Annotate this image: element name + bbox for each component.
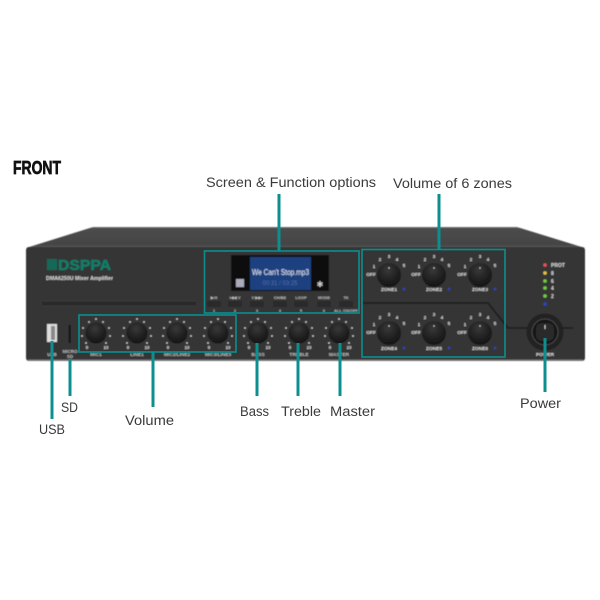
zone knob 4: OFF [366,330,376,336]
knob: MASTER [324,318,354,358]
zone knob 3: OFF [457,272,467,278]
zone knob 2: 3 [433,254,436,260]
display screen [231,255,329,291]
knob: BASS: 0 [248,345,251,350]
amplifier chassis [26,227,585,361]
arrow line: USB [50,341,54,419]
bottom edge highlight [28,360,583,361]
knob: MIC1: 10 [103,345,109,350]
zone knob 2: 1 [418,264,421,270]
USB port [47,324,57,357]
zone knob 6: 1 [464,322,467,328]
level LED indicators: 2 [551,294,554,300]
zone knob 1 [366,254,406,293]
CD slot [41,301,197,306]
label: SD: SD [61,400,78,415]
label: Volume of 6 zones: Volume of 6 zones [393,176,512,191]
micro SD slot [62,325,78,359]
function buttons [207,295,359,313]
zone knob 2 [411,254,451,293]
zone knob 3: ZONE3 [472,287,488,293]
label: USB: USB [39,422,65,437]
function buttons: 6 [323,308,326,313]
zone knob 4: 3 [388,312,391,318]
chassis top surface [26,227,585,248]
zone knob 6 [457,312,497,352]
USB port: USB [47,352,57,357]
zone knob 6: 3 [479,312,482,318]
knob: MIC2/LINE2: 0 [167,345,170,350]
chassis front face [26,247,585,361]
zone knob 1: 3 [388,254,391,260]
display screen: 00:31 / 03:25 [262,281,298,287]
knob: MASTER: 10 [346,345,352,350]
zone knob 5: 5 [448,321,451,327]
function buttons: TK [343,295,349,300]
knob: MIC3/LINE3: 10 [225,345,231,350]
knob: MIC1 [81,318,111,358]
knob: MIC2/LINE2: MIC2/LINE2 [164,352,191,358]
knob: BASS [243,318,273,358]
knob: MIC1: MIC1 [90,352,102,358]
knob: MASTER: 0 [329,345,332,350]
knob: MIC3/LINE3 [203,318,233,358]
zone knob 5: 2 [424,315,427,321]
label: Master: Master [330,404,376,419]
zone knob 2: 4 [441,257,444,263]
label: Bass: Bass [240,404,269,419]
label: Screen & Function options: Screen & Function options [206,175,376,190]
zone knob 6: ZONE6 [472,346,488,352]
zone knob 4: 1 [373,322,376,328]
function buttons: MODE [318,295,330,300]
brand logo: DSPPA: DSPPA [58,258,112,274]
zone knob 4: 5 [403,321,406,327]
zone knob 1: 1 [373,264,376,270]
arrow line: zones [438,194,440,250]
function buttons: 4 [279,308,282,313]
knob: LINE1: 10 [144,345,150,350]
zone knob 5: 1 [418,322,421,328]
function buttons: LOOP [295,295,307,300]
zone knob 2: 2 [424,257,427,263]
knob: MIC3/LINE3: MIC3/LINE3 [205,352,232,358]
callout box: screen and function options [204,251,359,313]
knob: MIC2/LINE2: 10 [184,345,190,350]
arrow line: treble [296,343,300,396]
callout box: volume knobs [79,315,236,352]
knob: LINE1: LINE1 [130,352,144,358]
zone knob 1: 4 [396,257,399,263]
function buttons: I◀◀ V [229,295,241,300]
zone knob 5: ZONE5 [426,346,442,352]
zone knob 2: OFF [411,272,421,278]
zone knob 5 [411,312,451,352]
zone knob 4 [366,312,406,352]
zone knob 2: 5 [448,263,451,269]
function buttons: ALL ON/OFF [334,308,359,313]
title: FRONT: FRONT [13,157,62,178]
function buttons: 5 [300,308,303,313]
zone knob 3: 4 [487,257,490,263]
knob: TREBLE: TREBLE [289,352,309,358]
knob: MIC3/LINE3: 0 [208,345,211,350]
function buttons: 2 [234,308,237,313]
display screen: ✱ [317,280,324,289]
callout box: zones [362,250,505,357]
arrow line: bass [256,343,258,396]
label: Treble: Treble [281,404,321,419]
zone knob 3 [457,254,497,293]
decorative panel groove [362,303,573,328]
arrow line: SD [68,359,72,396]
function buttons: CH/BE [274,295,287,300]
knob: MIC2/LINE2 [162,318,192,358]
micro SD slot: SD [67,354,74,359]
knob: TREBLE [284,318,314,358]
arrow line: master [338,343,342,396]
power switch: POWER [536,352,555,358]
knob: BASS: BASS [251,352,265,358]
level LED indicators: 4 [551,286,554,292]
arrow line: screen [278,194,280,251]
function buttons: 3 [256,308,259,313]
zone knob 3: 1 [464,264,467,270]
arrow line: power [544,338,546,392]
zone knob 1: 5 [403,263,406,269]
level LED indicators [543,263,565,306]
zone knob 5: OFF [411,330,421,336]
zone knob 3: 3 [479,254,482,260]
zone knob 6: 2 [470,315,473,321]
zone knob 5: 4 [441,315,444,321]
zone knob 5: 3 [433,312,436,318]
arrow line: volume [152,352,154,407]
knob: MIC1: 0 [86,345,89,350]
power switch [526,314,564,358]
knob: LINE1 [122,318,152,358]
label: Volume: Volume [125,413,174,428]
zone knob 3: 2 [470,257,473,263]
knob: BASS: 10 [265,345,271,350]
zone knob 4: ZONE4 [381,346,397,352]
zone knob 4: 4 [396,315,399,321]
zone knob 2: ZONE2 [426,287,442,293]
knob: MASTER: MASTER [329,352,350,358]
zone knob 1: 2 [379,257,382,263]
function buttons: 1 [213,308,216,313]
label: Power: Power [520,396,562,411]
zone knob 6: OFF [457,330,467,336]
function buttons: V ▶▶I [251,295,263,300]
zone knob 6: 5 [494,321,497,327]
model name: DMA6250U Mixer Amplifier [46,276,114,282]
level LED indicators: PROT [551,263,565,269]
zone knob 3: 5 [494,263,497,269]
zone knob 6: 4 [487,315,490,321]
display screen: We Can't Stop.mp3 [252,268,309,277]
zone knob 4: 2 [379,315,382,321]
knob: TREBLE: 0 [289,345,292,350]
knob: TREBLE: 10 [306,345,312,350]
micro SD slot: MICRO [62,349,78,354]
level LED indicators: 6 [551,279,554,285]
level LED indicators: 8 [551,271,554,277]
function buttons: ▶/II [210,295,217,300]
zone knob 1: OFF [366,272,376,278]
zone knob 1: ZONE1 [381,287,397,293]
knob: LINE1: 0 [127,345,130,350]
